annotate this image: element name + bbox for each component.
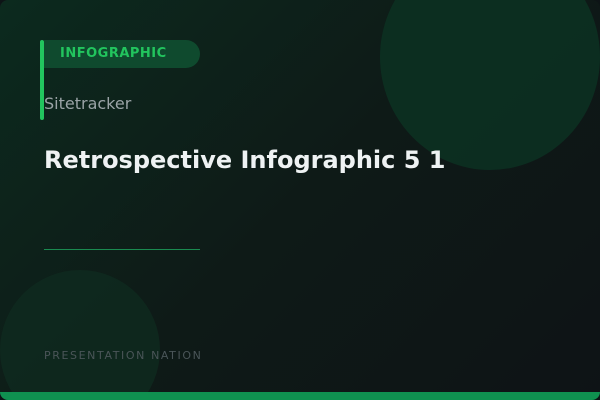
accent bar [40,40,44,120]
divider [44,249,200,250]
title: Retrospective Infographic 5 1 [44,146,445,174]
footer text: PRESENTATION NATION [44,349,202,362]
bottom bar [0,392,600,400]
badge: INFOGRAPHIC [60,46,167,61]
subtitle: Sitetracker [44,94,131,113]
badge [44,40,200,68]
